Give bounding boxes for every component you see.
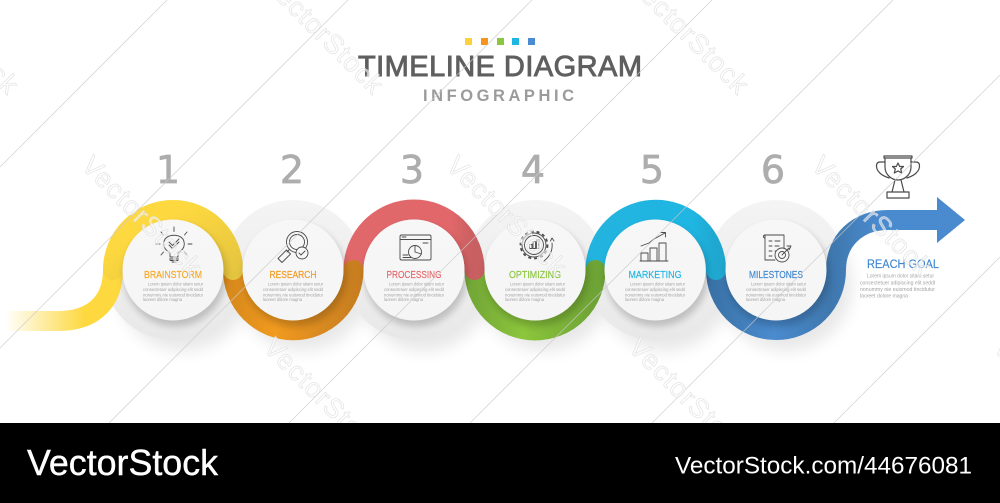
description: nonummy nie euismod tincidutur xyxy=(143,292,203,298)
label: OPTIMIZING xyxy=(509,269,561,281)
icon: browser chart xyxy=(400,235,431,260)
description: Lorem ipsum dolor sitam setur xyxy=(751,282,806,286)
description: consectetuer adipiscing elit sedd xyxy=(505,287,565,292)
step number 5: 5 xyxy=(640,148,664,192)
panel: brainstorm xyxy=(122,220,226,326)
description: Lorem ipsum dolor sitam setur xyxy=(630,282,685,286)
icon: light bulb xyxy=(156,227,192,262)
ribbon segment 1 xyxy=(5,210,233,321)
panel: marketing xyxy=(604,220,708,326)
goal description: Lorem ipsum dolor sitam setur xyxy=(867,274,934,280)
description: Lorem ipsum dolor sitam setur xyxy=(510,282,565,286)
ribbon segment 3 xyxy=(354,210,474,270)
goal description: consectetuer adipiscing elit seddl xyxy=(860,280,935,286)
description: nonummy nie euismod tincidutur xyxy=(746,292,806,298)
step number 6: 6 xyxy=(761,148,785,192)
goal description: laoreet dolore magna xyxy=(860,294,908,300)
step number 4: 4 xyxy=(521,148,545,192)
watermark overlay: VectorStock xyxy=(806,150,938,282)
label: MILESTONES xyxy=(749,269,803,281)
description: nonummy nie euismod tincidutur xyxy=(384,292,444,298)
description xyxy=(625,282,685,302)
description: nonummy nie euismod tincidutur xyxy=(625,292,685,298)
description: laoreet dolore magna xyxy=(625,297,664,302)
goal label: REACH GOAL xyxy=(867,259,940,271)
footer image id: VectorStock.com/44676081 xyxy=(675,452,972,480)
description xyxy=(143,282,203,302)
label: PROCESSING xyxy=(386,269,442,281)
panel: optimizing xyxy=(484,220,588,326)
description: nonummy nie euismod tincidutur xyxy=(263,292,323,298)
description: consectetuer adipiscing elit sedd xyxy=(625,287,685,292)
icon: gear with chart xyxy=(520,232,554,261)
step number 3: 3 xyxy=(400,148,424,192)
description: laoreet dolore magna xyxy=(746,297,785,302)
ribbon segment 4 xyxy=(474,270,596,330)
watermark overlay: VectorStock xyxy=(441,150,573,282)
icon: rising bar chart xyxy=(640,232,668,261)
footer bar xyxy=(0,423,1000,503)
ribbon timeline xyxy=(5,197,965,330)
label: BRAINSTORM xyxy=(144,269,202,281)
description: Lorem ipsum dolor sitam setur xyxy=(268,282,323,286)
goal description xyxy=(860,274,935,300)
footer brand: VectorStock xyxy=(27,442,219,483)
subtitle: INFOGRAPHIC xyxy=(423,87,574,105)
description: laoreet dolore magna xyxy=(143,297,182,302)
step number 2: 2 xyxy=(280,148,304,192)
description: nonummy nie euismod tincidutur xyxy=(505,292,565,298)
label: MARKETING xyxy=(628,269,682,281)
description xyxy=(746,282,806,302)
description xyxy=(263,282,323,302)
description: consectetuer adipiscing elit sedd xyxy=(263,287,323,292)
description: consectetuer adipiscing elit sedd xyxy=(143,287,203,292)
label: RESEARCH xyxy=(270,269,316,281)
description: consectetuer adipiscing elit sedd xyxy=(384,287,444,292)
description xyxy=(384,282,444,302)
background discs xyxy=(103,200,852,351)
description: Lorem ipsum dolor sitam setur xyxy=(148,282,203,286)
description: laoreet dolore magna xyxy=(505,297,544,302)
ribbon segment 6 with arrow xyxy=(716,197,965,330)
description xyxy=(505,282,565,302)
description: laoreet dolore magna xyxy=(263,297,302,302)
icon: checklist with target xyxy=(764,235,791,262)
description: consectetuer adipiscing elit sedd xyxy=(746,287,806,292)
description: laoreet dolore magna xyxy=(384,297,423,302)
watermark overlay: VectorStock xyxy=(623,332,755,464)
panel: processing xyxy=(364,220,468,326)
panel: milestones xyxy=(726,220,830,326)
panel: research xyxy=(242,220,346,326)
ribbon segment 5 xyxy=(596,210,716,270)
description: Lorem ipsum dolor sitam setur xyxy=(389,282,444,286)
watermark overlay: VectorStock xyxy=(76,150,208,282)
icon: trophy xyxy=(876,156,920,198)
watermark overlay: VectorStock xyxy=(258,332,390,464)
title: TIMELINE DIAGRAM xyxy=(358,51,642,83)
goal description: nonummy nie euismod tincidutur xyxy=(860,287,935,293)
step number 1: 1 xyxy=(156,148,180,192)
title colour squares xyxy=(465,38,535,45)
icon: magnifier xyxy=(278,232,308,262)
ribbon segment 2 xyxy=(233,270,354,330)
